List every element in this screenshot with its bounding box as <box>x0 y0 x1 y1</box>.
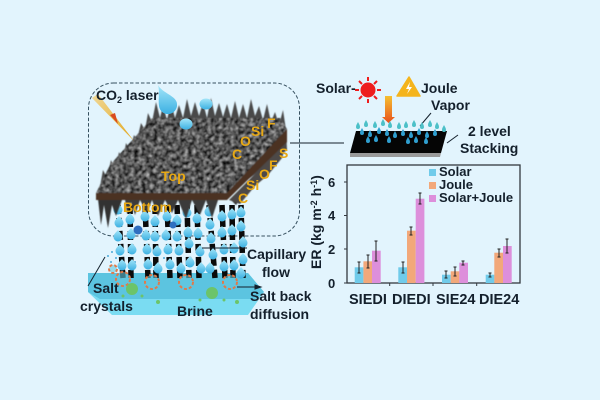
annotation lines <box>88 143 344 289</box>
y tick labels: 6 <box>328 175 335 190</box>
element labels on membrane: O <box>259 166 270 182</box>
icon: sun <box>355 77 381 103</box>
bottom spikes <box>98 199 240 228</box>
label: CO2 laser: laser <box>122 87 159 103</box>
y axis title: ER (kg m <box>308 208 324 269</box>
label: capillary flow <box>247 246 306 280</box>
y axis title: -2 <box>309 200 319 208</box>
element labels on membrane: Top <box>161 168 186 184</box>
label: 2 level stacking: 2 level <box>468 123 511 139</box>
capillary columns with droplets <box>114 203 248 278</box>
y tick labels: 0 <box>328 276 335 291</box>
arrow: vapor <box>420 113 431 126</box>
x axis labels: DIEDI <box>392 292 431 308</box>
element labels on membrane: Si <box>246 177 259 193</box>
label: salt crystals <box>80 280 133 314</box>
label: salt back diffusion: diffusion <box>250 306 309 322</box>
label: capillary flow: flow <box>262 264 290 280</box>
element labels on membrane: F <box>269 157 278 173</box>
element labels on membrane: C <box>232 146 242 162</box>
legend <box>429 164 513 205</box>
top spikes <box>99 98 287 193</box>
y axis title: ) <box>308 175 324 180</box>
arrow: stacking <box>447 135 458 143</box>
y axis title: h <box>308 188 324 200</box>
chart frame <box>347 165 520 283</box>
label: salt back diffusion <box>250 288 312 322</box>
y tick labels: 4 <box>328 208 336 223</box>
label: 2 level stacking <box>460 123 518 156</box>
slab edge <box>96 129 287 200</box>
legend: Solar <box>439 164 472 179</box>
icon: heat arrow <box>382 96 395 123</box>
y tick labels: 2 <box>328 242 335 257</box>
element labels on membrane: O <box>240 133 251 149</box>
panel: stacking schematic <box>316 77 518 157</box>
element labels on membrane: Si <box>251 123 264 139</box>
element labels on membrane: C <box>238 190 248 206</box>
panel: capillary brine layer <box>88 203 264 315</box>
bars: DIE24 <box>486 246 512 283</box>
grey base layer <box>350 153 441 157</box>
y tick labels <box>328 175 336 291</box>
label: CO2 laser: CO <box>96 87 117 103</box>
green salt ions <box>122 283 239 304</box>
label: salt crystals: Salt <box>93 280 119 296</box>
label: capillary flow: Capillary <box>247 246 306 262</box>
x axis labels: SIE24 <box>436 292 476 308</box>
icon: laser pen <box>92 94 134 141</box>
x axis labels <box>349 292 519 308</box>
vapor droplets row <box>356 119 446 144</box>
label: solar: Solar- <box>316 80 356 96</box>
droplet top centre <box>200 98 212 110</box>
bar chart <box>308 164 520 308</box>
label: salt back diffusion: Salt back <box>250 288 312 304</box>
legend: Joule <box>439 177 473 192</box>
bars: SIE24 <box>442 263 468 283</box>
label: brine: Brine <box>177 303 213 319</box>
element labels on membrane: Bottom <box>123 199 172 215</box>
x axis labels: SIEDI <box>349 292 387 308</box>
element labels on membrane: F <box>267 115 276 131</box>
y axis title: -1 <box>309 180 319 188</box>
bars: SIEDI <box>355 251 381 283</box>
bars: DIEDI <box>398 199 424 283</box>
brine pool <box>88 273 264 315</box>
right side spikes <box>229 142 287 204</box>
label: joule: Joule <box>421 80 458 96</box>
panel: textured membrane <box>90 98 290 228</box>
label: 2 level stacking: Stacking <box>460 140 518 156</box>
salt crystal rings <box>109 265 237 289</box>
error bars <box>358 193 508 278</box>
label: vapor: Vapor <box>431 97 470 113</box>
label: salt crystals: crystals <box>80 298 133 314</box>
dashed inset frame <box>88 83 300 236</box>
element labels on membrane: S <box>279 145 288 161</box>
label: CO2 laser: 2 <box>117 95 122 105</box>
spray dots <box>107 251 216 265</box>
element labels on membrane <box>123 115 288 215</box>
icon: warning bolt <box>397 77 420 96</box>
droplet on surface <box>180 118 192 130</box>
black stacked membrane <box>350 131 447 153</box>
top surface texture <box>96 117 288 194</box>
legend: Solar+Joule <box>439 190 513 205</box>
droplet top left <box>158 85 177 114</box>
x axis labels: DIE24 <box>479 292 519 308</box>
